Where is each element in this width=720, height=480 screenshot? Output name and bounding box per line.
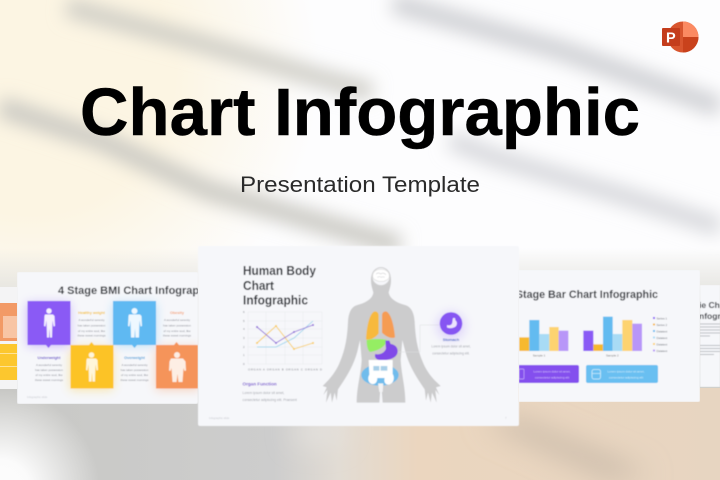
text: underweight: these sweet mornings [35, 378, 64, 382]
text: obesity: A wonderful serenity [164, 318, 191, 322]
callout: stomach: Lorem ipsum dolor sit amet, [431, 344, 471, 348]
stage 1: underweight tile [28, 301, 70, 348]
text: underweight: Underweight [38, 356, 61, 360]
text: underweight: A wonderful serenity [36, 363, 63, 367]
chart legend: Series 1 [656, 316, 667, 320]
button: purple note [505, 365, 579, 383]
line chart: 2 [243, 345, 245, 349]
chart legend: Datatext [656, 336, 667, 340]
chart legend: Datatext [656, 342, 667, 346]
chart legend: Datatext [656, 330, 667, 334]
human body figure [323, 268, 441, 403]
stage 3: overweight tile [113, 301, 156, 348]
text: obesity: of my entire soul, like [163, 329, 191, 333]
text: underweight: of my entire soul, like [35, 373, 63, 377]
panel: far-right slide [699, 285, 720, 387]
organ: left lung [366, 311, 379, 340]
page number: 7 [505, 416, 507, 420]
text: healthy weight: A wonderful serenity [78, 318, 105, 322]
text: healthy weight [77, 311, 106, 338]
heading: BMI slide title: 4 Stage BMI Chart Infographic [58, 285, 215, 297]
text: obesity: these sweet mornings [163, 334, 192, 338]
text: organ function: Organ Function [242, 382, 277, 386]
organ: bladder / pelvis [361, 364, 399, 386]
icon: PowerPoint logo: P [666, 30, 676, 46]
text lines [700, 324, 720, 355]
line chart: 3 [243, 336, 245, 340]
organ: brain [372, 268, 390, 286]
organ: right lung [382, 311, 395, 338]
line chart: 5 [243, 319, 245, 323]
bar chart [519, 317, 642, 357]
icon: PowerPoint logo [662, 21, 699, 53]
text: healthy weight: Healthy weight [78, 311, 106, 315]
chart legend: Datatext [656, 349, 667, 353]
heading: far-right slide title: ie Ch [699, 300, 720, 310]
footer text: Infographic slide [209, 416, 230, 420]
text: overweight: of my entire soul, like [121, 373, 148, 377]
heading: human body slide title: Human Body [243, 264, 316, 278]
line chart: 4 [243, 327, 245, 331]
organ: intestines [368, 360, 394, 392]
text: obesity: Obesity [170, 311, 185, 315]
panel: 4 stage BMI slide [17, 272, 215, 404]
bar chart: Sample 1 [533, 353, 546, 357]
text: underweight [35, 356, 64, 382]
heading: human body slide title [243, 264, 316, 308]
line chart: 0 [243, 362, 245, 366]
text: underweight: has taken possession [35, 368, 63, 372]
text: overweight: Overweight [124, 356, 146, 360]
subtitle: Presentation Template [240, 172, 480, 197]
line chart: ORGAN A ORGAN B ORGAN C ORGAN D [248, 368, 322, 372]
title: Chart Infographic [80, 75, 640, 150]
line chart: 1 [243, 353, 245, 357]
text: organ function [242, 382, 297, 402]
text: obesity: has taken possession [163, 324, 191, 328]
callout: stomach: Stomach [443, 337, 460, 342]
text: healthy weight: of my entire soul, like [78, 329, 105, 333]
text: overweight [120, 356, 149, 382]
chart legend [653, 316, 667, 353]
panel: human body slide [198, 246, 519, 426]
button: blue note: Lorem ipsum dolor sit amet, [607, 370, 645, 374]
text: overweight: these sweet mornings [120, 378, 149, 382]
text: organ function: consectetur adipiscing elit. Praesent [242, 398, 297, 402]
text: organ function: Lorem ipsum dolor sit amet, [242, 391, 284, 395]
text: healthy weight: has taken possession [78, 324, 106, 328]
button: purple note: Lorem ipsum dolor sit amet, [533, 370, 571, 374]
footer text: Infographic slide [27, 395, 48, 399]
text: healthy weight: these sweet mornings [77, 334, 106, 338]
text: overweight: has taken possession [121, 368, 149, 372]
button: blue note [586, 365, 658, 383]
line chart [243, 310, 322, 372]
line chart: 6 [243, 310, 245, 314]
button: purple note: consectetur adipiscing elit [535, 376, 569, 380]
stage 4: obese tile [156, 342, 198, 388]
stage 2: healthy tile [70, 342, 114, 388]
silhouette [323, 268, 441, 403]
organ: stomach [375, 341, 398, 360]
chart legend: Series 2 [656, 323, 667, 327]
bar chart: Sample 2 [606, 353, 619, 357]
button: blue note: consectetur adipiscing elit [609, 376, 643, 380]
callout: stomach: consectetur adipiscing elit. [432, 352, 470, 356]
panel: far-left slide [0, 287, 17, 389]
panel: bar chart slide [500, 270, 700, 402]
heading: human body slide title: Chart [243, 279, 275, 293]
text: obesity [163, 311, 192, 338]
heading: human body slide title: Infographic [243, 294, 308, 308]
heading: bar chart slide title: 4 Stage Bar Chart Infographic [507, 289, 658, 301]
organ: liver [367, 339, 387, 352]
callout: stomach [398, 312, 471, 356]
text: overweight: A wonderful serenity [121, 363, 148, 367]
